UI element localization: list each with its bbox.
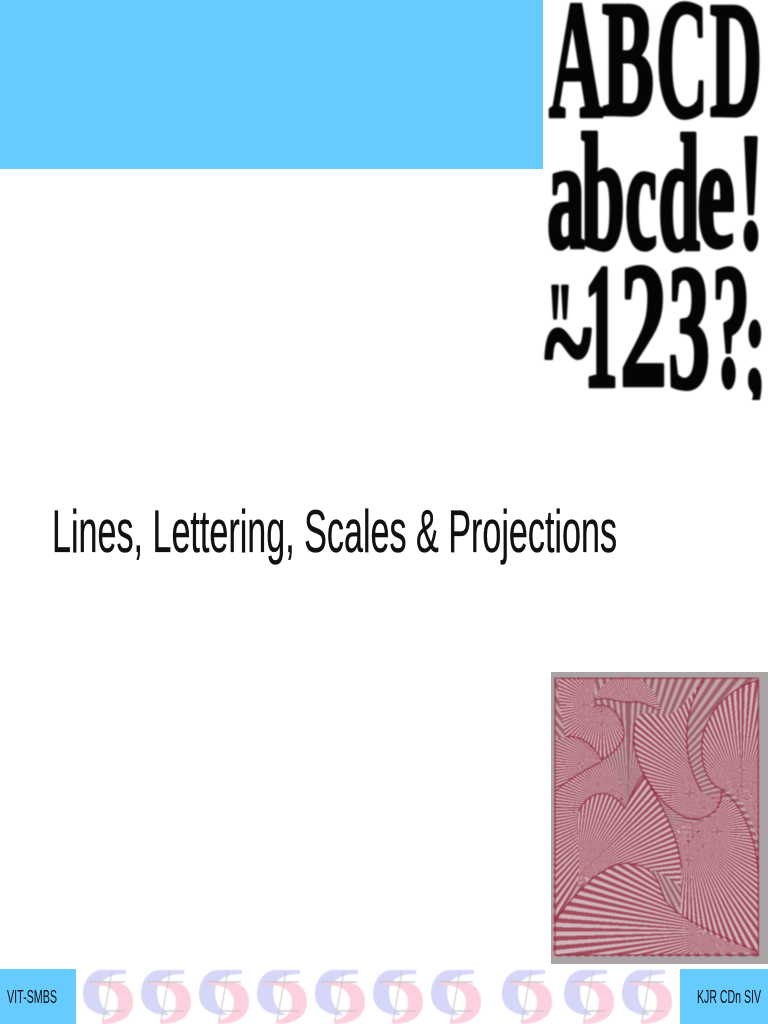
fan: lower right — [675, 798, 758, 952]
fan: top right — [702, 680, 758, 840]
lettering sample image: e — [697, 103, 735, 281]
string art image — [551, 672, 768, 964]
lettering sample image: a — [547, 107, 585, 282]
lettering sample image — [543, 0, 766, 402]
fan: top left — [558, 678, 624, 760]
fan: middle — [576, 776, 682, 888]
fan: left side — [554, 736, 602, 790]
lettering sample image: d — [658, 101, 700, 285]
fan: bottom left — [552, 863, 756, 956]
dark curved outlines — [552, 677, 760, 956]
fan: top centre — [595, 676, 660, 710]
fan: lower left edge — [554, 762, 625, 920]
lettering sample image: b — [581, 100, 625, 284]
fan: centre right sweep — [633, 683, 722, 819]
footer logo strip — [82, 970, 672, 1024]
top blue banner — [0, 0, 543, 169]
footer right box — [680, 969, 768, 1024]
footer left box — [0, 969, 76, 1024]
art base — [552, 678, 760, 957]
lettering sample image: c — [625, 108, 657, 283]
lettering sample image: " — [547, 257, 573, 400]
